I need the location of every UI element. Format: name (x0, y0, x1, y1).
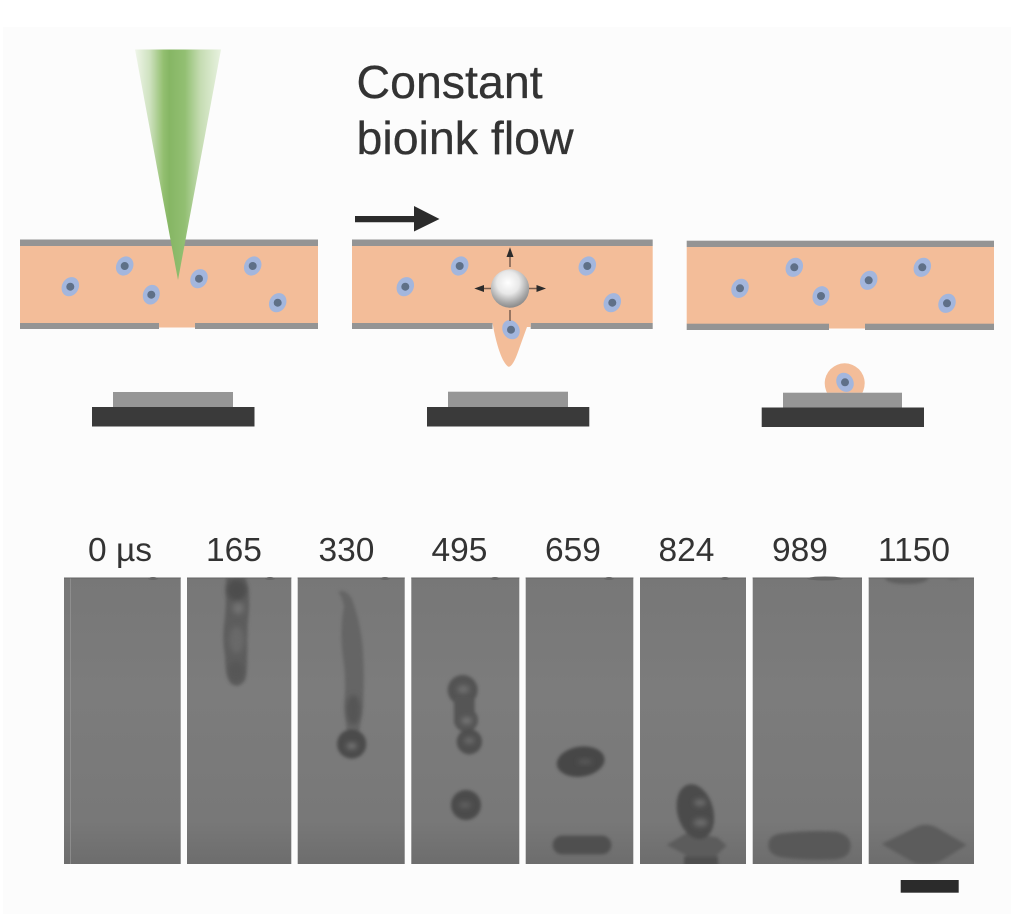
panel: laser pulse stage (20, 50, 318, 426)
arrow: flow direction (355, 206, 440, 232)
frame: 330 µs (298, 577, 405, 864)
substrate (92, 392, 254, 426)
channel with bioink (687, 241, 994, 330)
laser beam (135, 50, 221, 280)
time labels: 1150 (878, 532, 950, 569)
frame: 824 µs (640, 577, 746, 868)
channel with bioink and jet (352, 240, 653, 367)
time labels: 330 (319, 532, 374, 569)
time labels: 659 (545, 532, 601, 569)
frame: 659 µs (526, 577, 633, 864)
substrate (427, 392, 589, 426)
time labels: 0 µs (88, 532, 152, 569)
cells in bioink (393, 253, 624, 343)
time labels: 824 (659, 532, 714, 569)
expansion arrows (474, 247, 546, 321)
frame: 1150 µs (869, 573, 974, 865)
channel with bioink (20, 240, 318, 329)
heading: constant bioink flow: Constant (356, 56, 543, 108)
heading: constant bioink flow (356, 56, 574, 164)
frame: 989 µs (753, 576, 862, 864)
panel: jet formation stage (352, 240, 653, 426)
deposited droplet with cell (824, 363, 865, 393)
cells in bioink (58, 253, 290, 316)
time labels: 989 (772, 532, 828, 569)
substrate (762, 393, 924, 427)
time labels: 495 (432, 532, 487, 569)
time labels (88, 532, 950, 569)
time labels: 165 (206, 532, 262, 569)
frame: 0 µs (64, 577, 181, 864)
cavitation bubble (491, 269, 529, 308)
scale bar (901, 880, 959, 893)
frame: 165 µs (187, 575, 291, 864)
panel: deposited droplet stage (687, 241, 994, 427)
frame: 495 µs (411, 577, 519, 864)
cells in bioink (728, 254, 959, 316)
heading: constant bioink flow: bioink flow (356, 112, 574, 164)
